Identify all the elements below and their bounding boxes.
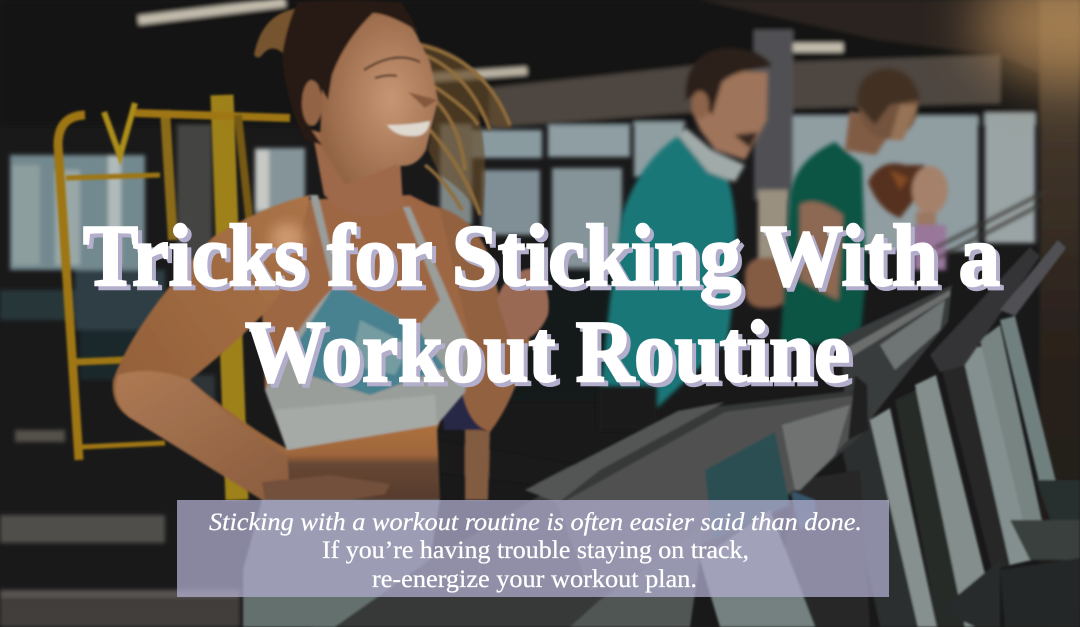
man in teal shirt xyxy=(598,48,787,430)
title text: Tricks for Sticking With a xyxy=(83,208,1000,305)
midriff xyxy=(287,425,440,500)
smile xyxy=(387,121,430,136)
title text xyxy=(83,208,1000,401)
caption text: re-energize your workout plan. xyxy=(372,566,697,593)
running woman xyxy=(113,0,549,627)
caption text: If you’re having trouble staying on track, xyxy=(322,537,749,564)
neck xyxy=(312,130,403,216)
title shadow: Workout Routine xyxy=(249,308,854,405)
caption panel xyxy=(177,500,889,597)
sports bra xyxy=(265,195,470,450)
caption text xyxy=(209,509,862,593)
leggings xyxy=(243,500,440,627)
title shadow xyxy=(87,212,1004,405)
woman in the far background xyxy=(868,163,1045,270)
left hand xyxy=(262,475,390,500)
caption text: Sticking with a workout routine is often easier said than done. xyxy=(209,509,862,536)
yellow squat rack xyxy=(58,95,290,500)
hair xyxy=(282,0,419,145)
left arm xyxy=(113,195,330,500)
title text: Workout Routine xyxy=(245,304,850,401)
ponytail xyxy=(254,8,300,58)
torso and chest xyxy=(262,195,470,450)
man in green shirt xyxy=(780,68,920,348)
right arm and fist xyxy=(430,205,549,432)
title shadow: Tricks for Sticking With a xyxy=(87,212,1004,309)
treadmills xyxy=(310,240,1080,627)
eyes and nose shadow xyxy=(364,58,420,78)
face xyxy=(320,13,438,185)
ear xyxy=(302,80,322,126)
flying hair xyxy=(420,42,512,218)
warm light top right xyxy=(975,0,1080,85)
runners in the background xyxy=(598,48,1045,430)
